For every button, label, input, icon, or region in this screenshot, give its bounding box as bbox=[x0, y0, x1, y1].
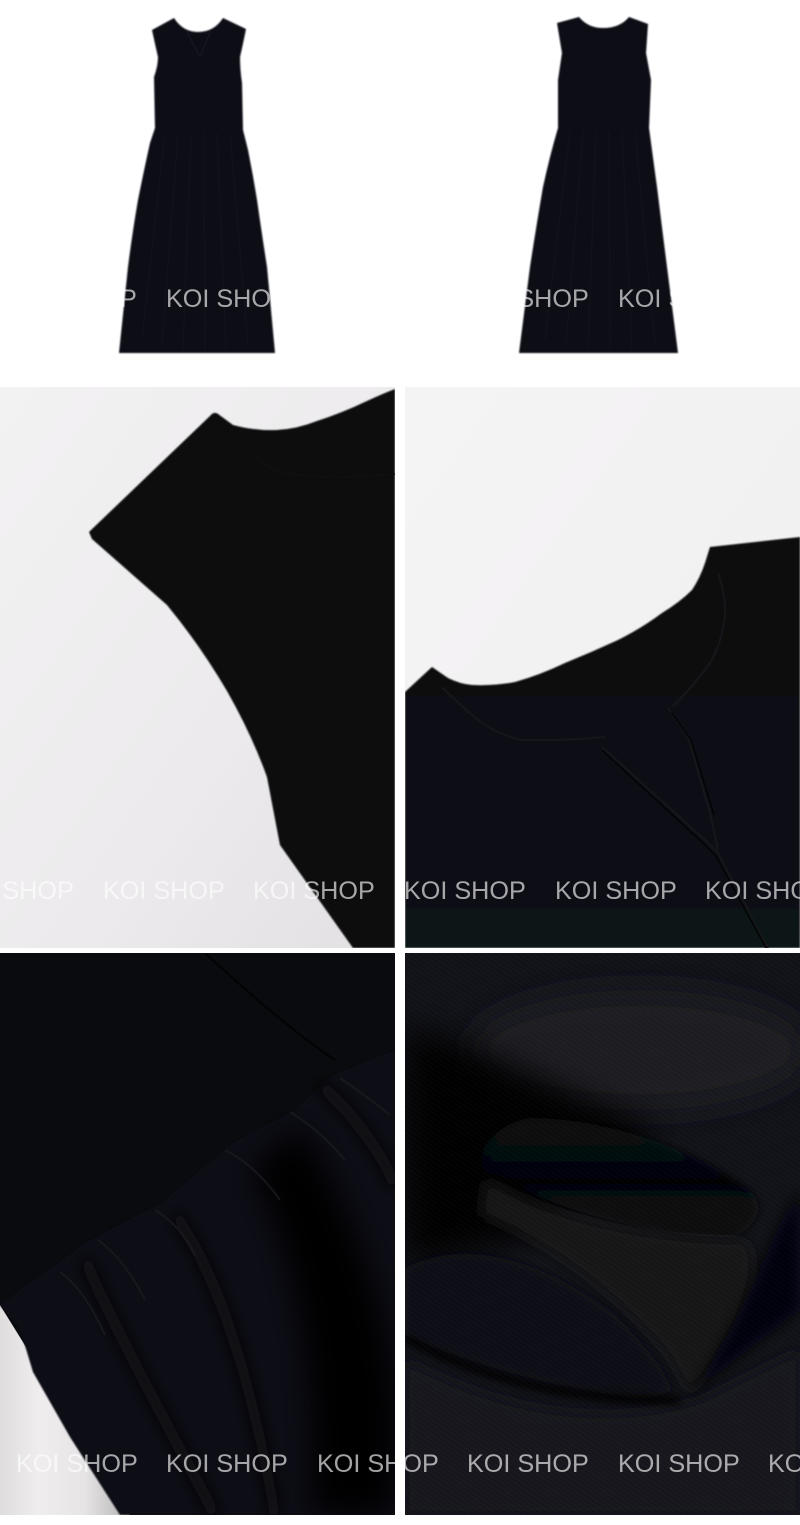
watermark row three bbox=[16, 1450, 800, 1478]
shadow under lower cuff bbox=[405, 1338, 680, 1400]
gathered skirt bbox=[0, 1050, 395, 1515]
watermark row two: KOI SHOP bbox=[253, 877, 375, 905]
watermark row one: KOI SHOP bbox=[15, 285, 137, 313]
watermark row three: KOI SHOP bbox=[16, 1450, 138, 1478]
knit rib texture bbox=[405, 953, 800, 1515]
upper sleeve highlight bbox=[490, 1006, 791, 1094]
watermark row three: KOI SHOP bbox=[317, 1450, 439, 1478]
photo: shoulder armhole close-up bbox=[0, 387, 395, 948]
watermark row two: KOI SHOP bbox=[404, 877, 526, 905]
gather highlights bbox=[60, 1078, 390, 1335]
photo: ribbed knit texture close-up bbox=[405, 953, 800, 1515]
watermark row three: KOI SHOP bbox=[166, 1450, 288, 1478]
watermark row one: KOI SHOP bbox=[166, 285, 288, 313]
watermark row two bbox=[0, 877, 800, 905]
lower folded cuff bbox=[427, 1257, 670, 1385]
watermark row two: KOI SHOP bbox=[555, 877, 677, 905]
shadow right of folds bbox=[702, 1200, 800, 1384]
middle fold bbox=[477, 1178, 570, 1244]
skirt fold shadows bbox=[250, 1125, 395, 1515]
photo: dress front view bbox=[119, 18, 275, 353]
neckline binding seams bbox=[442, 573, 768, 948]
watermark row one: KOI SHOP bbox=[618, 285, 740, 313]
bodice seam bbox=[205, 953, 335, 1060]
deep shadow under sleeve bbox=[405, 1025, 660, 1265]
photo: dress back view bbox=[519, 17, 678, 353]
watermark row one: KOI SHOP bbox=[467, 285, 589, 313]
photo: neckline slit close-up bbox=[405, 387, 800, 948]
watermark row one bbox=[15, 285, 740, 313]
panel gaps bbox=[0, 387, 800, 1515]
upper folded cuff bbox=[482, 1118, 758, 1237]
watermark row three: KOI SHOP bbox=[618, 1450, 740, 1478]
watermark row two: KOI SHOP bbox=[103, 877, 225, 905]
light backdrop wedge bbox=[0, 1305, 130, 1515]
watermark row one: KOI SHOP bbox=[317, 285, 439, 313]
watermark row three: KOI SHOP bbox=[467, 1450, 589, 1478]
photo: waist gathers close-up bbox=[0, 953, 395, 1515]
lower knit tone bbox=[405, 1350, 800, 1515]
